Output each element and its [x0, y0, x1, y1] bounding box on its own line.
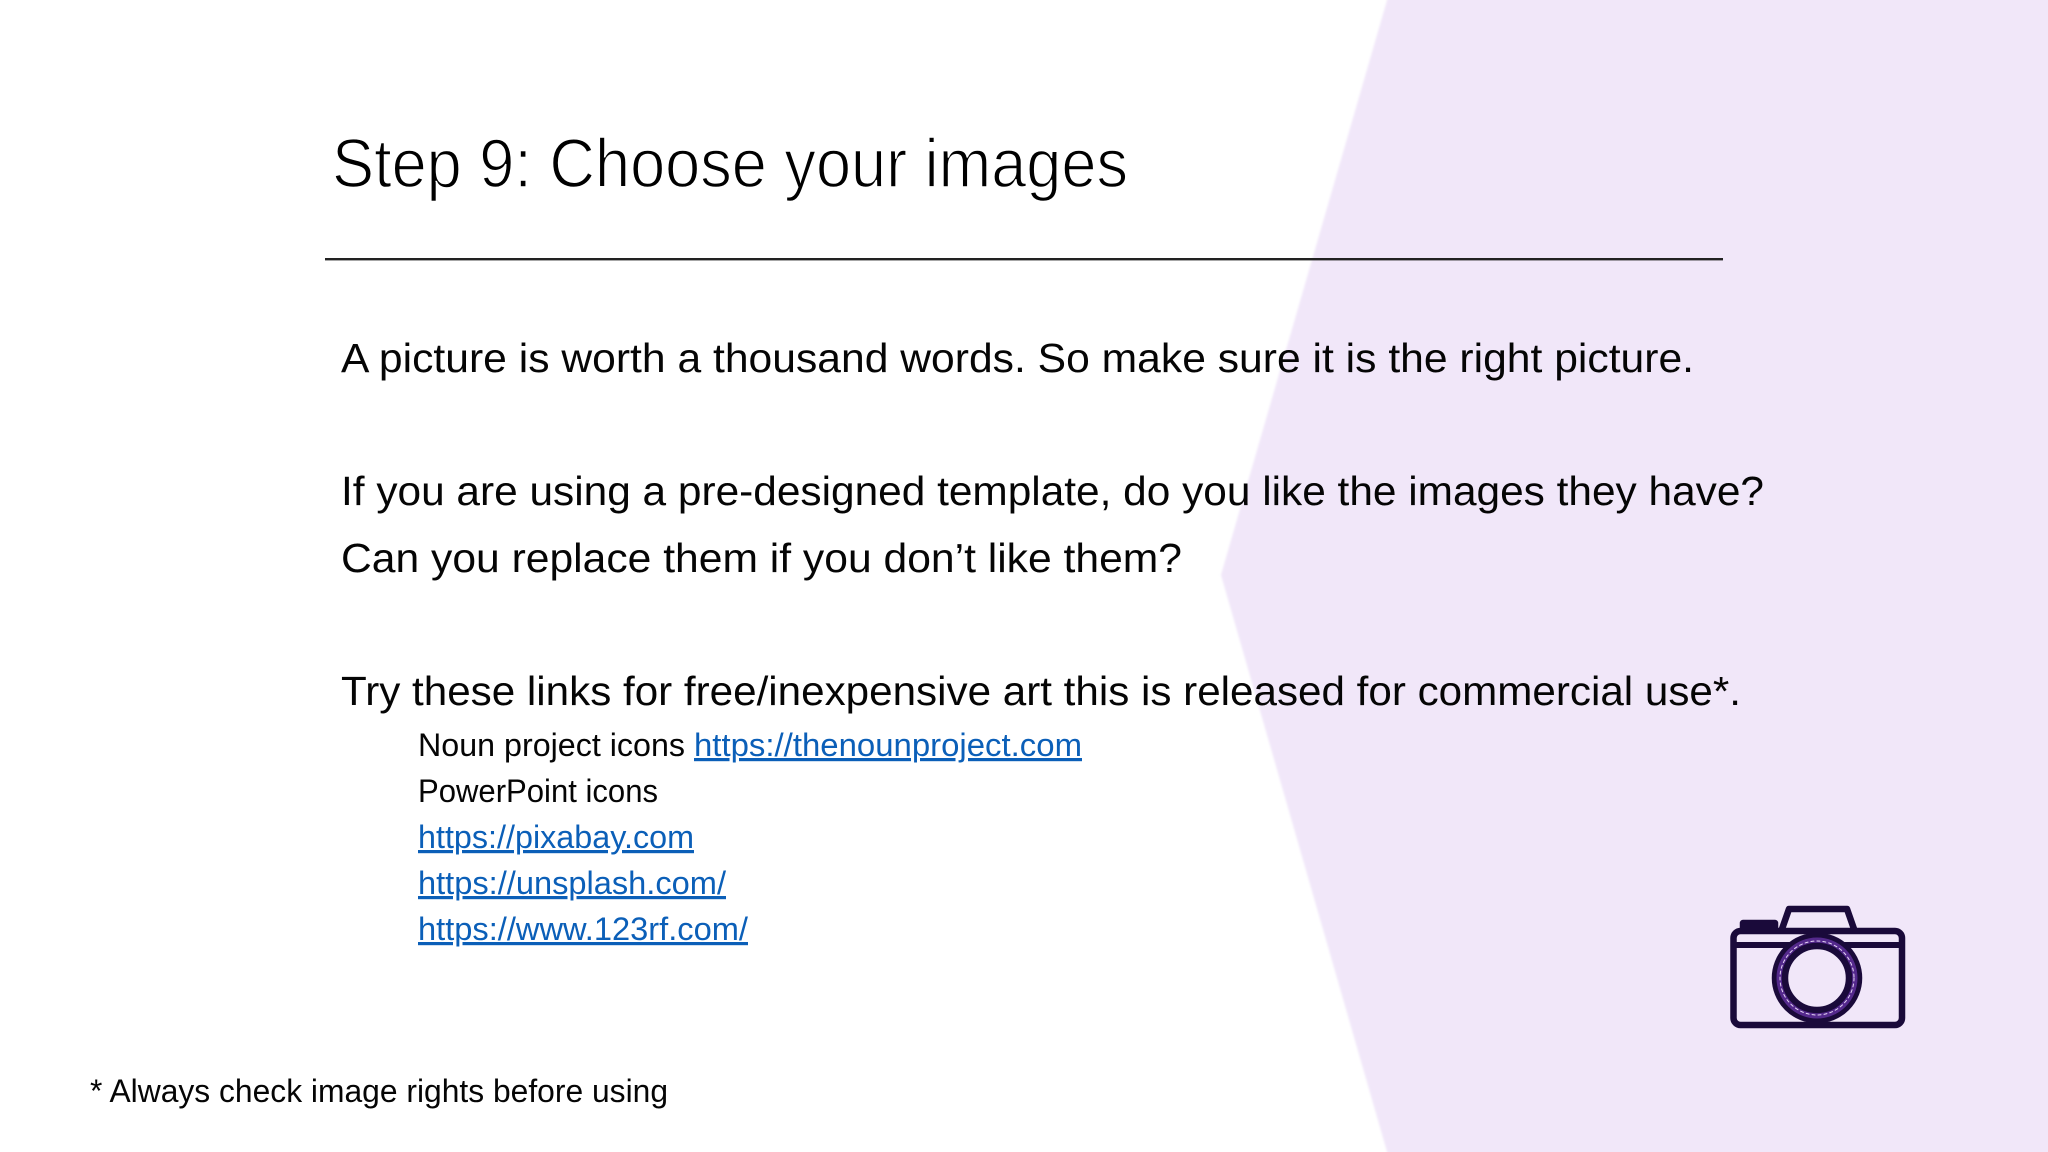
list of image resources: https://unsplash.com/: [418, 865, 726, 901]
body text: links intro: Try these links for free/inexpensive art this is released for commercial use*.: [341, 668, 1741, 714]
title rule: [325, 258, 1723, 260]
body text: intro: A picture is worth a thousand words. So make sure it is the right picture.: [341, 335, 1694, 381]
background lavender panel: [1221, 0, 2048, 1152]
title: Step 9: Choose your images: [332, 125, 1128, 202]
list of image resources: [418, 727, 1082, 947]
icon: camera: [1734, 909, 1902, 1025]
body text: template questions: Can you replace them if you don’t like them?: [341, 535, 1182, 581]
list of image resources: https://www.123rf.com/: [418, 911, 748, 947]
body text: template questions: If you are using a pre-designed template, do you like the images they have?: [341, 468, 1764, 514]
list of image resources: PowerPoint icons: [418, 773, 658, 809]
list of image resources: Noun project icons: [418, 727, 685, 763]
list of image resources: https://thenounproject.com: [694, 727, 1082, 763]
list of image resources: https://pixabay.com: [418, 819, 694, 855]
body text: template questions: [341, 468, 1764, 581]
footnote: * Always check image rights before using: [90, 1073, 668, 1109]
